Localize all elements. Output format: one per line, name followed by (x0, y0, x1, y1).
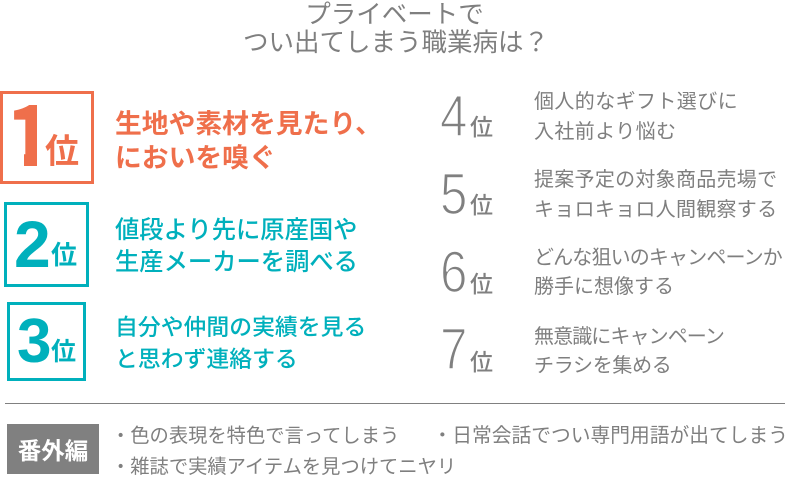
text: rank 6 description (534, 241, 782, 299)
text: rank 1 description (115, 102, 382, 175)
text: rank 3 description: 自分や仲間の実績を見る (115, 308, 366, 342)
badge: 1位 (0, 91, 94, 184)
badge: 3位: 3 (17, 307, 51, 376)
rank label: 7位: 7 (440, 317, 467, 382)
rank label: 4位: 4 (440, 84, 467, 149)
text: rank 3 description (115, 308, 366, 374)
title (243, 0, 549, 59)
badge: 1位: 位 (45, 124, 79, 173)
text: rank 7 description (534, 320, 724, 378)
rank label: 6位: 6 (440, 240, 467, 305)
badge: 3位: 位 (51, 332, 76, 368)
text: rank 5 description (534, 163, 777, 222)
label: 番外編: 番外編 (18, 432, 88, 466)
panel: extras (7, 419, 788, 479)
badge: 2位: 位 (51, 235, 77, 272)
rank label: 5位: 位 (470, 186, 493, 220)
text: rank 2 description: 生産メーカーを調べる (115, 242, 358, 277)
label: 番外編 (7, 424, 99, 474)
rank label: 4位: 位 (470, 108, 493, 142)
text: rank 5 description: 提案予定の対象商品売場で (534, 163, 777, 192)
rank label: 5位: 5 (440, 162, 467, 227)
panel: rank 6 (440, 240, 782, 305)
text: rank 2 description: 値段より先に原産国や (115, 210, 357, 245)
text: extra item 2: ・日常会話でつい専門用語が出てしまう (432, 419, 788, 448)
text: extra item 1: ・色の表現を特色で言ってしまう (111, 420, 399, 448)
text: rank 7 description: 無意識にキャンペーン (534, 320, 724, 349)
text: rank 6 description: 勝手に想像する (534, 270, 674, 299)
panel: rank 5 (440, 162, 777, 227)
badge: 1位: 1 (6, 71, 56, 190)
panel: rank 3 (7, 302, 366, 381)
rank label: 6位: 位 (470, 265, 493, 299)
rank label: 5位 (440, 162, 493, 227)
text: rank 4 description: 入社前より悩む (534, 115, 676, 144)
text: rank 2 description (115, 210, 358, 277)
badge: 3位 (7, 302, 86, 381)
text: rank 1 description: 生地や素材を見たり、 (115, 102, 382, 141)
rank label: 7位: 位 (470, 343, 493, 377)
text: rank 6 description: どんな狙いのキャンペーンか (534, 241, 782, 270)
panel: rank 7 (440, 317, 724, 382)
panel: rank 4 (440, 84, 738, 149)
badge: 2位 (4, 202, 89, 287)
badge: 2位: 2 (14, 207, 51, 281)
text: rank 4 description: 個人的なギフト選びに (534, 85, 738, 114)
rank label: 6位 (440, 240, 493, 305)
text: extra item 3: ・雑誌で実績アイテムを見つけてニヤリ (111, 451, 456, 479)
panel: rank 1 (0, 91, 382, 184)
rank label: 7位 (440, 317, 493, 382)
panel: rank 2 (4, 202, 358, 287)
text: rank 7 description: チラシを集める (534, 349, 672, 378)
text: rank 3 description: と思わず連絡する (115, 340, 298, 374)
text: rank 5 description: キョロキョロ人間観察する (534, 193, 777, 222)
title: つい出てしまう職業病は？ (243, 22, 549, 59)
text: rank 1 description: においを嗅ぐ (115, 136, 276, 175)
text: rank 4 description (534, 85, 738, 144)
rank label: 4位 (440, 84, 493, 149)
